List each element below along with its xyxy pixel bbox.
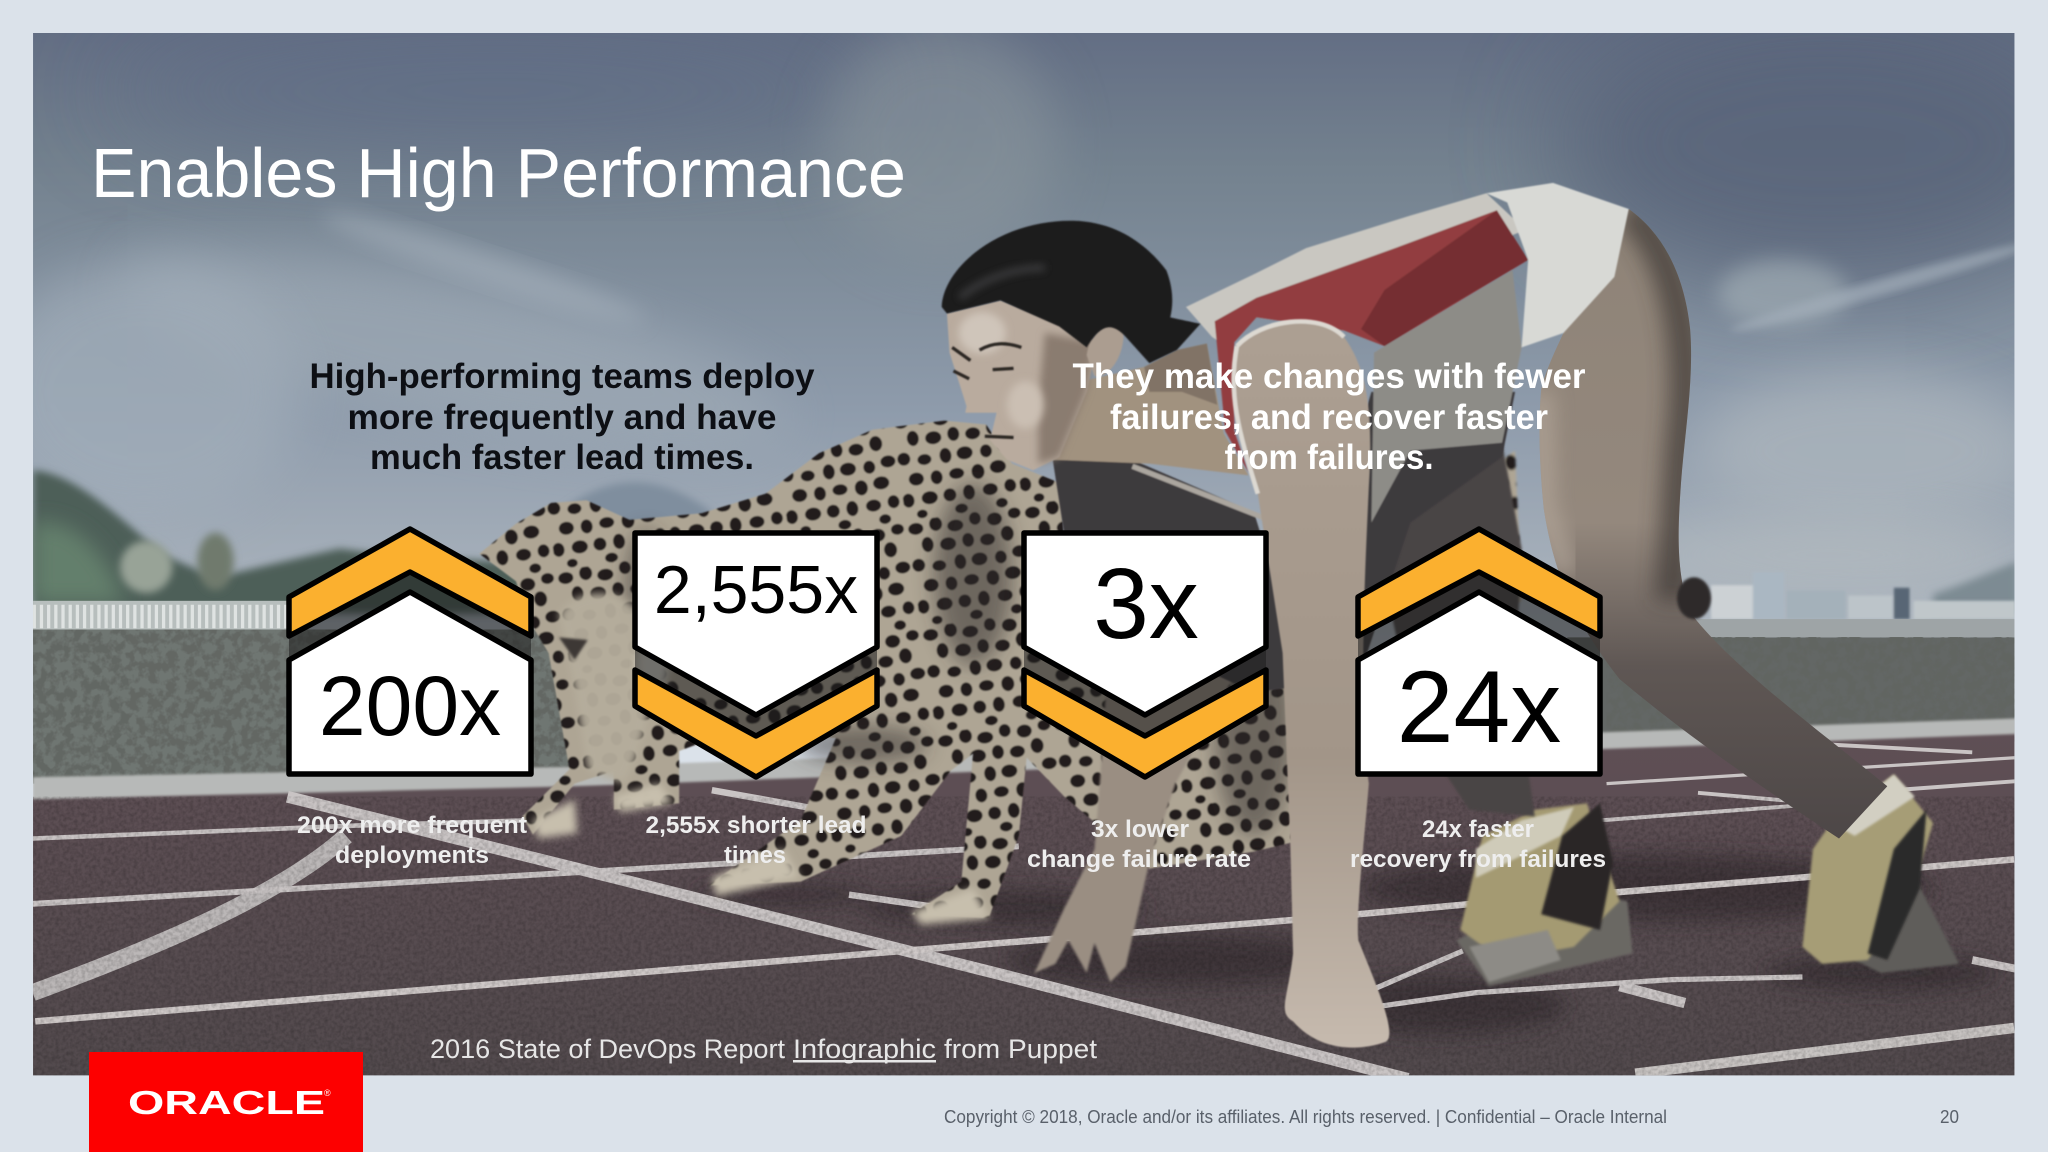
caption: 3x: 3x lower	[1091, 816, 1189, 843]
white kerb	[33, 718, 2018, 799]
caption: 200x	[297, 812, 527, 869]
caption: 200x: deployments	[335, 842, 489, 869]
source credit: Infographic	[793, 1034, 936, 1064]
Oracle logo: ®	[324, 1088, 331, 1098]
runner near leg	[1528, 196, 1907, 849]
caption: 24x	[1350, 816, 1606, 873]
source credit	[430, 1034, 1098, 1064]
title: Enables High Performance	[91, 134, 906, 212]
runner torso	[1053, 183, 1629, 692]
cheetah	[479, 421, 1522, 925]
hedge	[33, 619, 2018, 784]
grey side panel	[1371, 270, 1522, 522]
far hind leg sprint shoe and starting block	[1456, 803, 1633, 986]
source credit: from Puppet	[944, 1034, 1098, 1064]
distant hills	[33, 470, 2018, 614]
cheetah paws	[533, 784, 990, 925]
caption: 2,555x	[646, 812, 866, 869]
white shorts	[1486, 183, 1629, 347]
near sprint shoe and starting block	[1802, 775, 1959, 973]
Oracle logo	[89, 1052, 363, 1152]
sky with clouds	[0, 0, 2048, 660]
far arm of the runner	[1034, 676, 1230, 983]
dark bun shape behind leg	[1677, 577, 1711, 619]
caption: 2,555x: times	[724, 842, 786, 869]
badge: 24x up: 24x	[1397, 650, 1561, 764]
caption: 200x: 200x more frequent	[297, 812, 527, 839]
palm trees	[120, 533, 234, 593]
track lane lines	[33, 744, 2018, 1079]
ear	[1087, 324, 1124, 376]
caption: 3x	[1027, 816, 1251, 873]
badge: 3x down: 3x	[1093, 548, 1199, 660]
cheetah patch behind right thigh	[1504, 451, 1522, 602]
runner far leg	[1392, 447, 1536, 818]
distant city skyline	[1710, 584, 2014, 619]
brows and eyes	[952, 344, 1021, 438]
caption: 24x: 24x faster	[1422, 816, 1534, 843]
white back panel	[1186, 193, 1526, 346]
page number: 20	[1940, 1107, 1959, 1127]
heading: deploy faster: more frequently and have	[348, 398, 776, 437]
heading: deploy faster: much faster lead times.	[370, 438, 754, 477]
dark chest	[1053, 392, 1515, 692]
heading: deploy faster: High-performing teams deploy	[310, 357, 815, 396]
cheetah pale face and mane	[559, 593, 653, 784]
red singlet	[1215, 210, 1528, 473]
badge: 3x down	[1024, 533, 1266, 777]
chest strap	[1132, 466, 1266, 519]
track shadows	[692, 854, 1998, 1034]
track surface	[33, 731, 2018, 1084]
track grain	[33, 797, 2018, 1078]
badge: 24x up	[1358, 529, 1600, 774]
Oracle logo: ORACLE	[128, 1084, 325, 1121]
cheetah dark fur shading	[626, 483, 1293, 836]
caption: 3x: change failure rate	[1027, 846, 1251, 873]
badge: 2,555x down	[635, 533, 877, 777]
heading: deploy faster	[310, 357, 815, 477]
source credit: 2016 State of DevOps Report	[430, 1034, 785, 1064]
badge: 200x up: 200x	[319, 659, 501, 753]
hair highlight	[960, 268, 1045, 298]
badge: 2,555x down: 2,555x	[654, 552, 858, 628]
badge: 200x up	[289, 529, 531, 774]
neck	[1053, 344, 1249, 475]
runner near arm	[1234, 321, 1389, 1048]
white fence	[33, 601, 294, 631]
runner face	[947, 300, 1124, 470]
caption: 24x: recovery from failures	[1350, 846, 1606, 873]
runner hair	[942, 221, 1200, 363]
footer copyright: Copyright © 2018, Oracle and/or its affiliates. All rights reserved. | Confidential – Oracle Internal	[944, 1107, 1667, 1127]
caption: 2,555x: 2,555x shorter lead	[646, 812, 866, 839]
heading: fewer failures: from failures.	[1224, 438, 1434, 477]
heading: fewer failures	[1072, 357, 1586, 477]
heading: fewer failures: failures, and recover faster	[1110, 398, 1548, 437]
heading: fewer failures: They make changes with fewer	[1072, 357, 1586, 396]
